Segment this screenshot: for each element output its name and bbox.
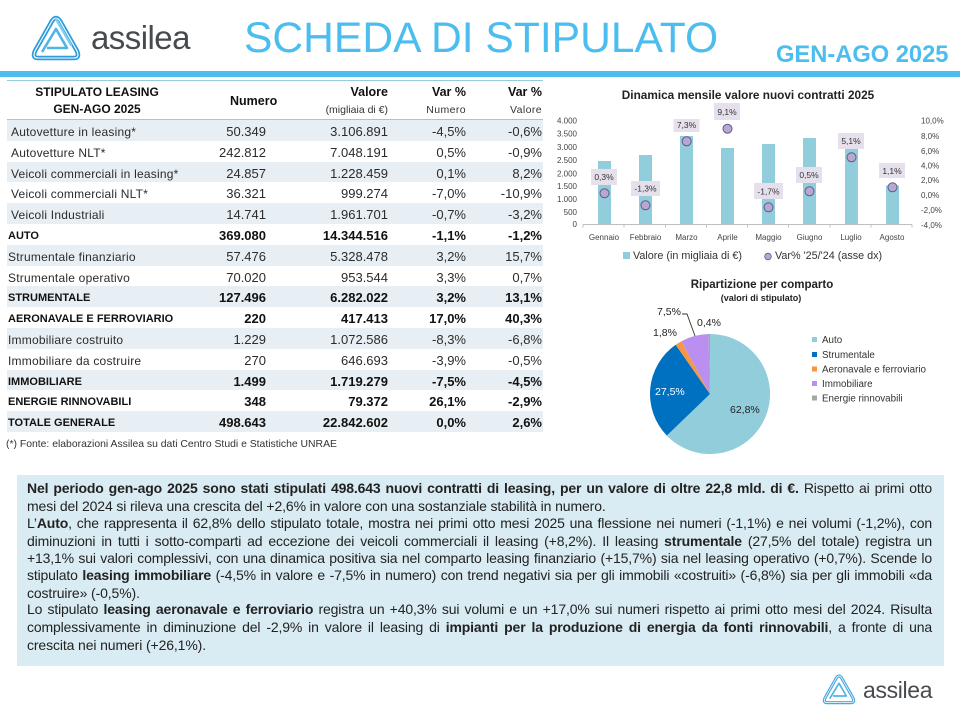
row: Strumentale operativo: 3,3% [436, 270, 466, 285]
pie value labels [653, 306, 760, 416]
chart: monthly contract value: 0,5% [799, 170, 819, 180]
right axis labels: 2,0% [921, 176, 939, 185]
row: Autovetture NLT: 0,5% [436, 145, 466, 160]
left axis labels: 500 [564, 208, 578, 217]
logo: assilea footer: assilea [863, 677, 932, 703]
row: Immobiliare costruito: -8,3% [432, 332, 466, 347]
row: TOTALE GENERALE: 22.842.602 [323, 415, 388, 430]
month labels: Gennaio [589, 233, 620, 242]
pie legend: Aeronavale e ferroviario [822, 364, 927, 376]
row: Immobiliare costruito [7, 328, 543, 349]
row: ENERGIE RINNOVABILI: 348 [244, 394, 266, 409]
chart: monthly contract value: 7,3% [677, 120, 697, 130]
row: Veicoli commerciali in leasing: 8,2% [512, 166, 542, 181]
row: Autovetture NLT: 242.812 [219, 145, 266, 160]
pie value labels: 62,8% [730, 404, 760, 416]
row: TOTALE GENERALE: 498.643 [219, 415, 266, 430]
row: AUTO: -1,1% [432, 228, 466, 243]
right axis labels: 0,0% [921, 191, 939, 200]
month labels: Aprile [717, 233, 738, 242]
pie title: Ripartizione per comparto [691, 279, 833, 291]
row: AERONAVALE E FERROVIARIO: AERONAVALE E FERROVIARIO [8, 313, 173, 325]
chart: monthly contract value: 9,1% [717, 107, 737, 117]
row: Strumentale operativo [8, 270, 542, 285]
row: Strumentale operativo: Strumentale operativo [8, 271, 130, 285]
row: Strumentale operativo: 70.020 [226, 270, 266, 285]
row: IMMOBILIARE: -4,5% [508, 374, 542, 389]
row: Strumentale finanziario: 57.476 [226, 249, 266, 264]
row: Autovetture in leasing: 50.349 [226, 124, 266, 139]
month labels: Luglio [840, 233, 862, 242]
pie value labels: 7,5% [657, 306, 681, 318]
table header: Valore [350, 85, 388, 99]
row: Veicoli Industriali: -0,7% [432, 207, 466, 222]
row: Immobiliare costruito: 1.229 [233, 332, 266, 347]
chart legend [623, 250, 882, 262]
panel: commentary text: Lo stipulato leasing aeronavale e ferroviario registra un +40,3% sui volumi e un +17,0% sui numeri rispetto ai primi otto mesi del 2024. Risulta [27, 601, 932, 617]
row: TOTALE GENERALE: TOTALE GENERALE [8, 417, 115, 429]
table header: Var % [508, 85, 542, 99]
row: Autovetture in leasing: Autovetture in leasing* [11, 125, 136, 139]
chart: monthly contract value: -1,3% [634, 184, 657, 194]
row: Strumentale finanziario [7, 245, 543, 266]
row: Veicoli Industriali [7, 203, 543, 224]
chart legend: Var% '25/'24 (asse dx) [775, 250, 882, 262]
panel: leasing table [7, 80, 543, 432]
row: Autovetture NLT: 7.048.191 [330, 145, 388, 160]
left axis labels: 1.500 [557, 182, 578, 191]
pie value labels: 0,4% [697, 317, 721, 329]
row: TOTALE GENERALE [7, 411, 543, 432]
panel: commentary text: crescita nei numeri (+26,1%). [27, 637, 206, 653]
row: Autovetture in leasing: -4,5% [432, 124, 466, 139]
chart: monthly contract value: 1,1% [882, 166, 902, 176]
pie value labels: 27,5% [655, 386, 685, 398]
panel: commentary text: stipulato leasing immobiliare (-4,5% in valore e -7,5% in numero) con trend negativi sia per gli immobili «costruiti» (-6,8%) sia per gli immobili «da [27, 567, 932, 583]
header rule [0, 71, 960, 77]
pie slices [650, 334, 770, 454]
left axis labels: 3.000 [557, 143, 578, 152]
right axis labels: 4,0% [921, 162, 939, 170]
bars: value per month [598, 136, 899, 224]
row: TOTALE GENERALE: 2,6% [512, 415, 542, 430]
row: AUTO: 369.080 [219, 228, 266, 243]
row: IMMOBILIARE: 1.719.279 [330, 374, 388, 389]
row: AERONAVALE E FERROVIARIO [8, 311, 542, 326]
panel: commentary text: diminuzioni in tutti i sotto-comparti ad eccezione dei veicoli commerciali il leasing (+8,2%). Il leasing strumentale (27,5% del totale) registra un [27, 533, 932, 549]
table header: Valore [510, 104, 542, 116]
row: AERONAVALE E FERROVIARIO: 40,3% [505, 311, 542, 326]
row: Veicoli Industriali: -3,2% [508, 207, 542, 222]
row: Immobiliare da costruire: 270 [244, 353, 266, 368]
row: Veicoli commerciali NLT: 36.321 [226, 186, 266, 201]
right axis labels: 6,0% [921, 147, 939, 156]
footnote: source: (*) Fonte: elaborazioni Assilea su dati Centro Studi e Statistiche UNRAE [6, 439, 337, 450]
row: Immobiliare da costruire: 646.693 [341, 353, 388, 368]
logo: assilea header [32, 16, 190, 60]
row: Strumentale finanziario: Strumentale finanziario [8, 250, 136, 264]
row: Autovetture NLT: Autovetture NLT* [11, 146, 106, 160]
table header: Var % [432, 85, 466, 99]
row: STRUMENTALE: 6.282.022 [330, 290, 388, 305]
row: Strumentale finanziario: 5.328.478 [330, 249, 388, 264]
left axis labels: 4.000 [557, 116, 578, 126]
table header [35, 85, 542, 116]
row: Strumentale finanziario: 15,7% [505, 249, 542, 264]
panel: commentary text: +13,1% sui valori complessivi, con una dinamica positiva sia nel comparto leasing finanziario (+15,7%) sia nel leasing operativo (+0,7%). Scende lo [27, 550, 932, 566]
chart legend: Valore (in migliaia di €) [633, 250, 742, 262]
period heading: GEN-AGO 2025 [776, 42, 948, 68]
row: Veicoli commerciali NLT: -10,9% [501, 186, 542, 201]
row: IMMOBILIARE [7, 370, 543, 390]
chart: monthly contract value: 5,1% [841, 136, 861, 146]
row: Veicoli commerciali NLT [11, 186, 542, 201]
table header: Numero [230, 94, 277, 108]
row: Autovetture in leasing: -0,6% [508, 124, 542, 139]
month labels: Maggio [755, 233, 782, 242]
row: IMMOBILIARE: IMMOBILIARE [8, 376, 82, 388]
row: Veicoli Industriali: 1.961.701 [330, 207, 388, 222]
row: AUTO: 14.344.516 [323, 228, 388, 243]
left axis labels [557, 116, 578, 229]
row: ENERGIE RINNOVABILI: 79.372 [348, 394, 388, 409]
month labels: Marzo [675, 233, 698, 242]
logo: assilea header: assilea [91, 19, 190, 56]
leader line [682, 314, 695, 336]
row: Strumentale operativo: 0,7% [512, 270, 542, 285]
row: AUTO: -1,2% [508, 228, 542, 243]
row: ENERGIE RINNOVABILI: -2,9% [508, 394, 542, 409]
row: IMMOBILIARE: -7,5% [432, 374, 466, 389]
row: Veicoli Industriali: 14.741 [226, 207, 266, 222]
row: Strumentale operativo: 953.544 [341, 270, 388, 285]
right axis labels [921, 116, 944, 230]
row: STRUMENTALE: 3,2% [436, 290, 466, 305]
pie value labels: 1,8% [653, 327, 677, 339]
left axis labels: 2.500 [557, 156, 578, 165]
row: ENERGIE RINNOVABILI: ENERGIE RINNOVABILI [8, 396, 131, 408]
row: AUTO: AUTO [8, 230, 39, 242]
row: Autovetture in leasing [7, 120, 543, 141]
left axis labels: 1.000 [557, 195, 578, 204]
row: Immobiliare da costruire: -3,9% [432, 353, 466, 368]
panel: commentary text: mesi del 2024 si rileva una crescita del +2,6% in valore con una sostanziale stabilità in numero. [27, 498, 606, 514]
month labels: Agosto [880, 233, 905, 242]
left axis labels: 3.500 [557, 130, 578, 138]
row: Immobiliare da costruire: -0,5% [508, 353, 542, 368]
row: ENERGIE RINNOVABILI [8, 394, 542, 409]
row: Veicoli commerciali NLT: -7,0% [432, 186, 466, 201]
table header: (migliaia di €) [326, 104, 388, 116]
row: Immobiliare costruito: Immobiliare costruito [8, 333, 123, 347]
row: Veicoli commerciali in leasing: 1.228.459 [330, 166, 388, 181]
chart: monthly contract value: 0,3% [594, 172, 614, 182]
variation data labels [591, 103, 905, 199]
pie legend: Strumentale [822, 350, 875, 361]
row: Immobiliare da costruire: Immobiliare da costruire [8, 354, 141, 368]
row: Veicoli commerciali NLT: Veicoli commerciali NLT* [11, 187, 148, 201]
table header: STIPULATO LEASING [35, 85, 159, 99]
table header: Numero [426, 104, 466, 116]
month labels [589, 233, 905, 242]
table header: GEN-AGO 2025 [53, 102, 141, 116]
chart: monthly contract value [557, 88, 944, 262]
panel: commentary text: Nel periodo gen-ago 2025 sono stati stipulati 498.643 nuovi contratti di leasing, per un valore di oltre 22,8 mld. di €. Rispetto ai primi otto [27, 480, 932, 496]
row: Veicoli commerciali in leasing [7, 162, 543, 182]
row: Autovetture in leasing: 3.106.891 [330, 124, 388, 139]
left axis labels: 2.000 [557, 170, 578, 178]
row: Immobiliare costruito: 1.072.586 [330, 332, 388, 347]
chart: monthly contract value: -1,7% [757, 186, 780, 196]
pie subtitle: (valori di stipulato) [721, 293, 801, 303]
pie legend: Energie rinnovabili [822, 394, 903, 404]
row: STRUMENTALE: 127.496 [219, 290, 266, 305]
row: ENERGIE RINNOVABILI: 26,1% [429, 394, 466, 409]
left axis labels: 0 [573, 220, 578, 229]
panel: commentary text [17, 475, 944, 666]
row: IMMOBILIARE: 1.499 [233, 374, 266, 389]
title: SCHEDA DI STIPULATO [244, 14, 718, 62]
chart: sector breakdown pie [650, 279, 927, 454]
month labels: Giugno [797, 233, 823, 242]
panel: commentary text: L’Auto, che rappresenta il 62,8% dello stipulato totale, mostra nei primi otto mesi 2025 una flessione nei numeri (-1,1%) e nei volumi (-1,2%), con [27, 515, 932, 531]
month labels: Febbraio [630, 233, 662, 242]
row: TOTALE GENERALE: 0,0% [436, 415, 466, 430]
row: AERONAVALE E FERROVIARIO: 417.413 [341, 311, 388, 326]
row: Veicoli Industriali: Veicoli Industriali [11, 208, 105, 222]
pie legend: Auto [822, 335, 843, 346]
variation markers [600, 124, 897, 212]
panel: commentary text: complessivamente in diminuzione del -2,9% in valore il leasing di impianti per la produzione di energia da fonti rinnovabili, a fronte di una [27, 619, 932, 635]
row: STRUMENTALE [7, 286, 543, 307]
row: Veicoli commerciali in leasing: 24.857 [226, 166, 266, 181]
row: Veicoli commerciali in leasing: 0,1% [436, 166, 466, 181]
right axis labels: -2,0% [921, 206, 942, 215]
right axis labels: -4,0% [921, 221, 942, 230]
right axis labels: 8,0% [921, 132, 939, 141]
chart title: Dinamica mensile valore nuovi contratti 2025 [622, 88, 875, 102]
panel: commentary text: costruire» (-0,5%). [27, 585, 140, 601]
row: Autovetture NLT: -0,9% [508, 145, 542, 160]
logo: assilea footer [822, 674, 933, 704]
row: Immobiliare da costruire [8, 353, 542, 368]
row: AERONAVALE E FERROVIARIO: 220 [244, 311, 266, 326]
row: Immobiliare costruito: -6,8% [508, 332, 542, 347]
row: STRUMENTALE: 13,1% [505, 290, 542, 305]
right axis labels: 10,0% [921, 116, 944, 126]
row: Autovetture NLT [11, 145, 542, 160]
pie legend [812, 335, 927, 404]
row: AERONAVALE E FERROVIARIO: 17,0% [429, 311, 466, 326]
row: Veicoli commerciali in leasing: Veicoli commerciali in leasing* [11, 167, 179, 181]
row: Strumentale finanziario: 3,2% [436, 249, 466, 264]
row: STRUMENTALE: STRUMENTALE [8, 292, 90, 304]
row: Veicoli commerciali NLT: 999.274 [341, 186, 388, 201]
pie legend: Immobiliare [822, 379, 873, 390]
row: AUTO [8, 228, 542, 243]
